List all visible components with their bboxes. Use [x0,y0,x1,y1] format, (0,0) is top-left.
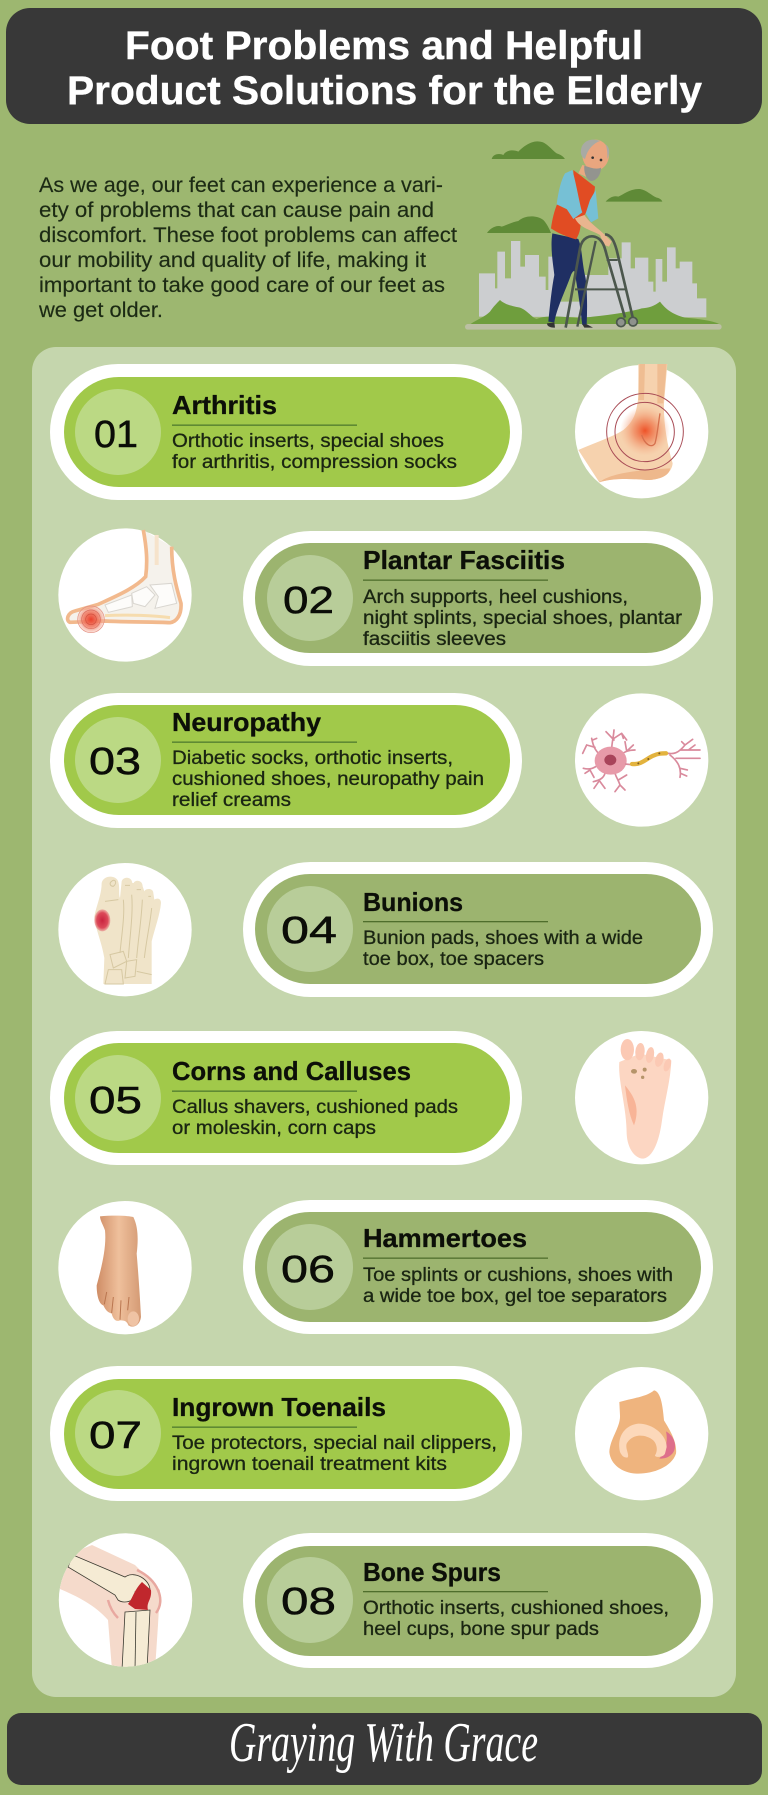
description: neuropathy [172,748,484,811]
row 08: Bone Spurs [243,1533,713,1668]
description: bone spurs [363,1598,669,1640]
number 01: 01 [94,414,138,456]
description: ingrown toenails: ingrown toenail treatment kits [172,1454,447,1475]
pill: arthritis [50,364,522,500]
description: arthritis: for arthritis, compression socks [172,452,457,473]
description: neuropathy: cushioned shoes, neuropathy pain [172,769,484,790]
description: hammertoes: Toe splints or cushions, shoes with [363,1265,673,1286]
title banner: Foot Problems and Helpful [125,24,643,68]
intro text: our mobility and quality of life, making it [39,249,426,272]
heading: Neuropathy: Neuropathy [172,707,322,737]
number 07 [75,1390,161,1476]
icon: bunion foot bones [58,863,192,996]
number 04: 04 [281,910,337,952]
intro text: important to take good care of our feet as [39,274,445,297]
icon: foot top view [58,1201,192,1334]
number 02 [267,555,353,641]
row 07: Ingrown Toenails [50,1366,522,1501]
number 07: 07 [89,1415,142,1457]
description: corns and calluses: or moleskin, corn caps [172,1118,376,1139]
pill: hammertoes [243,1200,713,1334]
pill: bone spurs [243,1533,713,1668]
heading: Bone Spurs: Bone Spurs [363,1557,501,1587]
brand name: Graying With Grace [229,1712,538,1774]
row 03: Neuropathy [50,693,522,828]
description: plantar fasciitis: fasciitis sleeves [363,629,506,650]
description: plantar fasciitis: Arch supports, heel cushions, [363,587,628,608]
heading: Ingrown Toenails: Ingrown Toenails [172,1392,386,1422]
icon: inflamed ankle [575,364,708,498]
number 05: 05 [89,1080,142,1122]
title banner: Product Solutions for the Elderly [67,69,703,113]
description: arthritis: Orthotic inserts, special shoes [172,431,444,452]
number 06: 06 [281,1249,335,1291]
description: ingrown toenails: Toe protectors, special nail clippers, [172,1433,497,1454]
heading: Hammertoes: Hammertoes [363,1223,527,1253]
icon: ingrown toenail [575,1367,708,1500]
title banner [6,8,762,124]
row 06: Hammertoes [243,1200,713,1334]
number 04 [267,886,353,972]
number 02: 02 [283,580,334,622]
description: hammertoes: a wide toe box, gel toe separators [363,1286,667,1307]
description: ingrown toenails [172,1433,497,1475]
heading: Bunions: Bunions [363,887,463,917]
number 01 [75,389,161,475]
number 08: 08 [281,1581,336,1623]
number 05 [75,1055,161,1141]
description: bone spurs: Orthotic inserts, cushioned shoes, [363,1598,669,1619]
pill: plantar fasciitis [243,531,713,666]
description: bunions: toe box, toe spacers [363,949,544,970]
heading: Plantar Fasciitis: Plantar Fasciitis [363,545,565,575]
description: bunions: Bunion pads, shoes with a wide [363,928,643,949]
intro text: we get older. [38,299,163,322]
number 06 [267,1224,353,1310]
intro text: ety of problems that can cause pain and [39,199,434,222]
row 02: Plantar Fasciitis [243,531,713,666]
description: bone spurs: heel cups, bone spur pads [363,1619,599,1640]
description: corns and calluses [172,1097,458,1139]
description: neuropathy: relief creams [172,790,291,811]
number 08 [267,1557,353,1643]
illustration: elderly man with walker [465,140,722,330]
icon: knee joint with bone spur [55,1533,192,1670]
description: plantar fasciitis [363,587,683,650]
number 03 [75,717,161,803]
description: arthritis [172,431,457,473]
description: hammertoes [363,1265,673,1307]
intro text: As we age, our feet can experience a vari- [39,174,443,197]
pill: bunions [243,862,713,997]
row 05: Corns and Calluses [50,1031,522,1165]
content panel [32,347,736,1697]
icon: foot sole with corns [575,1031,708,1164]
number 03: 03 [89,741,141,783]
intro text [38,174,457,322]
description: neuropathy: Diabetic socks, orthotic inserts, [172,748,453,769]
pill: neuropathy [50,693,522,828]
icon: neuron [575,693,708,827]
description: bunions [363,928,643,970]
icon: foot skeleton with toe pain [58,528,192,662]
row 04: Bunions [243,862,713,997]
description: plantar fasciitis: night splints, special shoes, plantar [363,608,683,629]
pill: ingrown toenails [50,1366,522,1501]
description: corns and calluses: Callus shavers, cushioned pads [172,1097,458,1118]
footer banner [7,1712,762,1785]
row 01: Arthritis [50,364,522,500]
pill: corns and calluses [50,1031,522,1165]
heading: Arthritis: Arthritis [172,390,277,420]
heading: Corns and Calluses: Corns and Calluses [172,1056,411,1086]
intro text: discomfort. These foot problems can affect [39,224,457,247]
